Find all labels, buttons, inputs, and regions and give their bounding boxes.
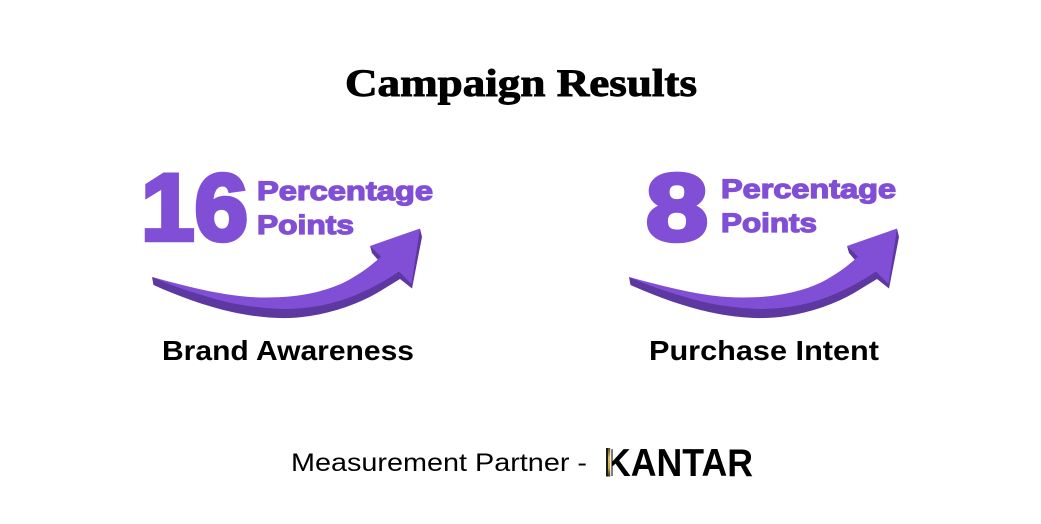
- label: percentage points: [257, 176, 433, 240]
- label: percentage points: [721, 174, 896, 238]
- title: Campaign Results: [345, 62, 697, 105]
- arrow: rising curve: [152, 228, 422, 318]
- caption: purchase intent: Purchase Intent: [649, 335, 879, 366]
- big number: 8: 8: [646, 155, 708, 261]
- arrow: rising curve: [629, 228, 899, 318]
- label: percentage points: Points: [257, 210, 354, 240]
- caption: brand awareness: Brand Awareness: [162, 335, 414, 366]
- label: percentage points: Points: [721, 208, 817, 238]
- panel: purchase intent: [629, 155, 899, 366]
- logo: kantar: KANTAR: [605, 442, 753, 485]
- label: percentage points: Percentage: [257, 176, 433, 206]
- footer: measurement partner: [291, 442, 753, 485]
- label: percentage points: Percentage: [721, 174, 896, 204]
- panel: brand awareness: [141, 155, 433, 366]
- big number: 16: 16: [141, 155, 248, 261]
- partner label: Measurement Partner -: [291, 449, 587, 477]
